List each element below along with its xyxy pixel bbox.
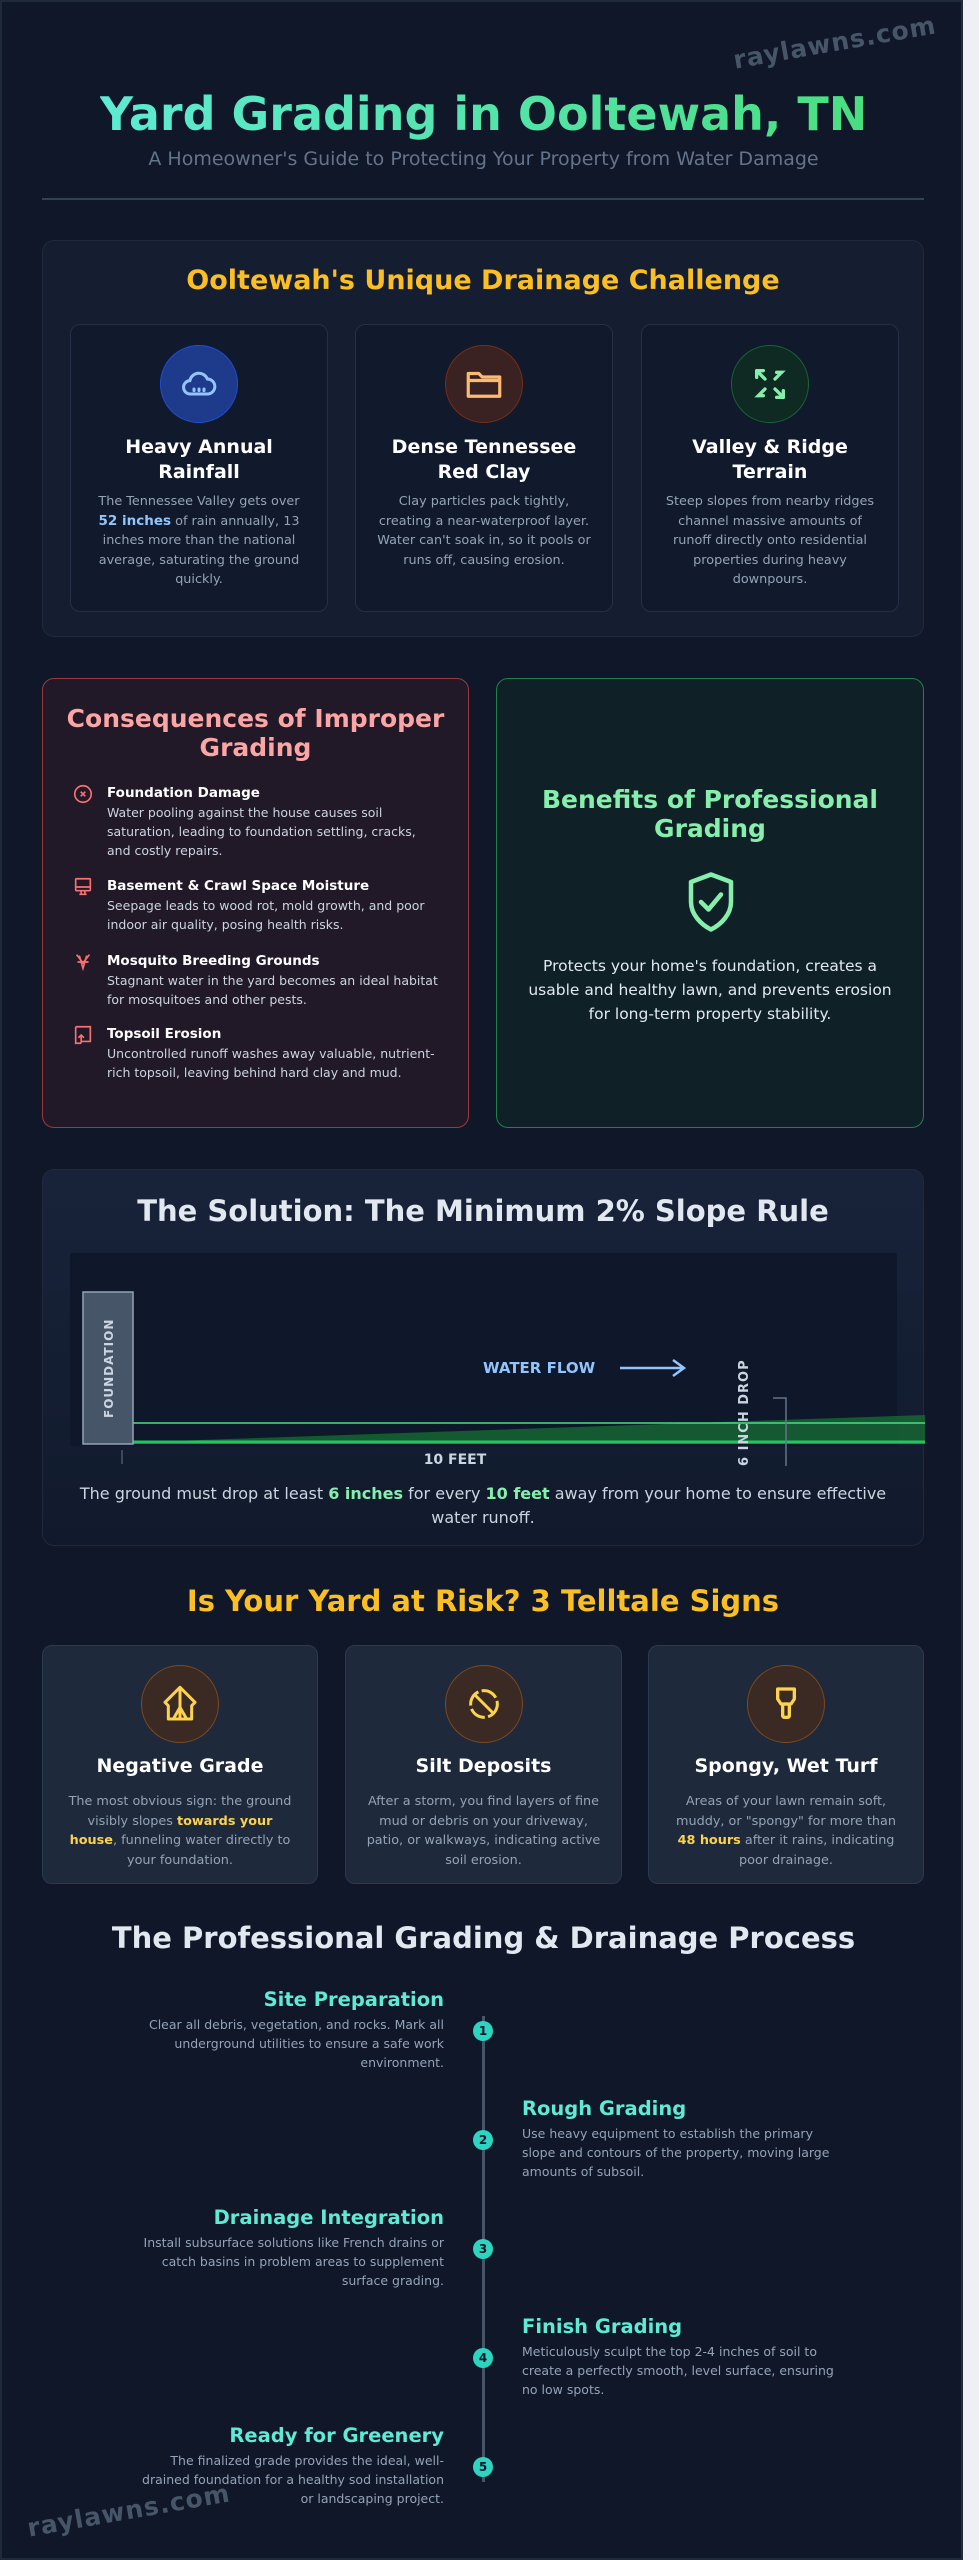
icon: blocked circle xyxy=(444,1665,522,1743)
item: foundation damage: Foundation Damage xyxy=(107,785,260,801)
chart: slope diagram: FOUNDATION xyxy=(102,1319,116,1418)
item: basement moisture xyxy=(74,878,425,932)
step 4: Finish Grading xyxy=(522,2315,682,2338)
card: red clay: Dense Tennessee xyxy=(392,436,576,458)
card: terrain: Steep slopes from nearby ridges channel massive amounts of runoff directly onto residential properties during heavy downpours. xyxy=(666,494,874,587)
item: basement moisture: Basement & Crawl Space Moisture xyxy=(107,878,369,894)
heading: drainage challenge: Ooltewah's Unique Drainage Challenge xyxy=(186,265,780,296)
panel: benefits xyxy=(496,678,924,1128)
step 4: Meticulously sculpt the top 2-4 inches of soil to create a perfectly smooth, level surface, ensuring no low spots. xyxy=(522,2344,834,2397)
item: mosquito: Mosquito Breeding Grounds xyxy=(107,953,320,969)
step 3 xyxy=(144,2206,493,2288)
icon: cloud rain xyxy=(160,345,238,423)
icon: plug xyxy=(747,1665,825,1743)
step 5 xyxy=(142,2424,493,2506)
card: terrain xyxy=(641,324,899,612)
item: foundation damage: Water pooling against the house causes soil saturation, leading to foundation settling, cracks, and costly repairs. xyxy=(107,805,416,858)
card: negative grade: The most obvious sign: the ground visibly slopes towards your house, funneling water directly to your foundation. xyxy=(69,1794,291,1868)
card: rainfall: The Tennessee Valley gets over 52 inches of rain annually, 13 inches more than the national average, saturating the ground quickly. xyxy=(98,494,300,587)
heading: consequences: Consequences of Improper Grading xyxy=(67,704,444,762)
heading: telltale signs: Is Your Yard at Risk? 3 Telltale Signs xyxy=(187,1584,779,1618)
step 3: 3 xyxy=(479,2242,487,2256)
timeline xyxy=(142,1988,834,2506)
text: benefits: Protects your home's foundation, creates a usable and healthy lawn, and prevents erosion for long-term property stability. xyxy=(528,957,892,1023)
step 2: Rough Grading xyxy=(522,2097,686,2120)
watermark top: raylawns.com xyxy=(731,10,938,75)
card: terrain: Valley & Ridge xyxy=(692,436,848,458)
heading: slope rule: The Solution: The Minimum 2% Slope Rule xyxy=(137,1194,829,1228)
step 4 xyxy=(473,2315,834,2397)
item: basement moisture: Seepage leads to wood rot, mold growth, and poor indoor air quality, posing health risks. xyxy=(107,898,425,932)
watermark bottom: raylawns.com xyxy=(25,2478,232,2543)
card: red clay: Clay particles pack tightly, creating a near-waterproof layer. Water can't soak in, so it pools or runs off, causing erosion. xyxy=(377,494,591,568)
chart: slope diagram: WATER FLOW xyxy=(483,1359,596,1377)
card: rainfall: Heavy Annual xyxy=(125,436,273,458)
chart: slope diagram: 10 FEET xyxy=(424,1452,487,1468)
step 1: 1 xyxy=(479,2024,487,2038)
card: silt deposits: Silt Deposits xyxy=(416,1755,551,1777)
step 2: 2 xyxy=(479,2133,487,2147)
panel: slope rule xyxy=(42,1169,924,1546)
card: negative grade: Negative Grade xyxy=(97,1755,263,1777)
item: mosquito: Stagnant water in the yard becomes an ideal habitat for mosquitoes and other pests. xyxy=(107,973,438,1007)
step 3: Install subsurface solutions like French drains or catch basins in problem areas to supplement surface grading. xyxy=(144,2235,444,2288)
icon: house xyxy=(141,1665,219,1743)
step 1: Clear all debris, vegetation, and rocks. Mark all underground utilities to ensure a safe work environment. xyxy=(149,2017,444,2070)
title: Yard Grading in Ooltewah, TN xyxy=(100,87,867,141)
item: foundation damage xyxy=(74,784,416,858)
heading: benefits: Benefits of Professional Grading xyxy=(542,785,878,843)
card: negative grade xyxy=(42,1645,318,1884)
panel: consequences xyxy=(42,678,469,1128)
card: silt deposits: After a storm, you find layers of fine mud or debris on your driveway, patio, or walkways, indicating active soil erosion. xyxy=(367,1794,600,1868)
item: mosquito xyxy=(76,953,438,1007)
card: red clay: Red Clay xyxy=(438,461,530,483)
step 5: 5 xyxy=(479,2460,487,2474)
subtitle: A Homeowner's Guide to Protecting Your Property from Water Damage xyxy=(148,148,819,170)
step 2: Use heavy equipment to establish the primary slope and contours of the property, moving large amounts of subsoil. xyxy=(522,2126,829,2179)
icon: shield check xyxy=(688,872,734,932)
chart: slope diagram: 6 INCH DROP xyxy=(737,1359,752,1466)
step 5: Ready for Greenery xyxy=(229,2424,444,2447)
item: topsoil erosion: Uncontrolled runoff washes away valuable, nutrient-rich topsoil, leaving behind hard clay and mud. xyxy=(107,1046,435,1080)
card: red clay xyxy=(355,324,613,612)
card: rainfall xyxy=(70,324,328,612)
card: spongy turf xyxy=(648,1645,924,1884)
heading: process: The Professional Grading & Drainage Process xyxy=(112,1921,855,1955)
step 1 xyxy=(149,1988,493,2070)
step 2 xyxy=(473,2097,829,2179)
card: spongy turf: Areas of your lawn remain soft, muddy, or "spongy" for more than 48 hours after it rains, indicating poor drainage. xyxy=(676,1794,896,1868)
step 3: Drainage Integration xyxy=(214,2206,444,2229)
chart: slope diagram xyxy=(70,1253,925,1468)
card: rainfall: Rainfall xyxy=(158,461,240,483)
panel: drainage challenge xyxy=(42,240,924,637)
caption: slope: The ground must drop at least 6 inches for every 10 feet away from your home to ensure effective water runoff. xyxy=(80,1484,886,1527)
step 1: Site Preparation xyxy=(264,1988,444,2011)
card: silt deposits xyxy=(345,1645,622,1884)
card: terrain: Terrain xyxy=(733,461,807,483)
step 5: The finalized grade provides the ideal, well-drained foundation for a healthy sod installation or landscaping project. xyxy=(142,2453,444,2506)
icon: folder xyxy=(445,345,523,423)
icon: arrows xyxy=(731,345,809,423)
card: spongy turf: Spongy, Wet Turf xyxy=(694,1755,878,1777)
item: topsoil erosion: Topsoil Erosion xyxy=(107,1026,221,1042)
item: topsoil erosion xyxy=(74,1026,435,1080)
step 4: 4 xyxy=(479,2351,487,2365)
